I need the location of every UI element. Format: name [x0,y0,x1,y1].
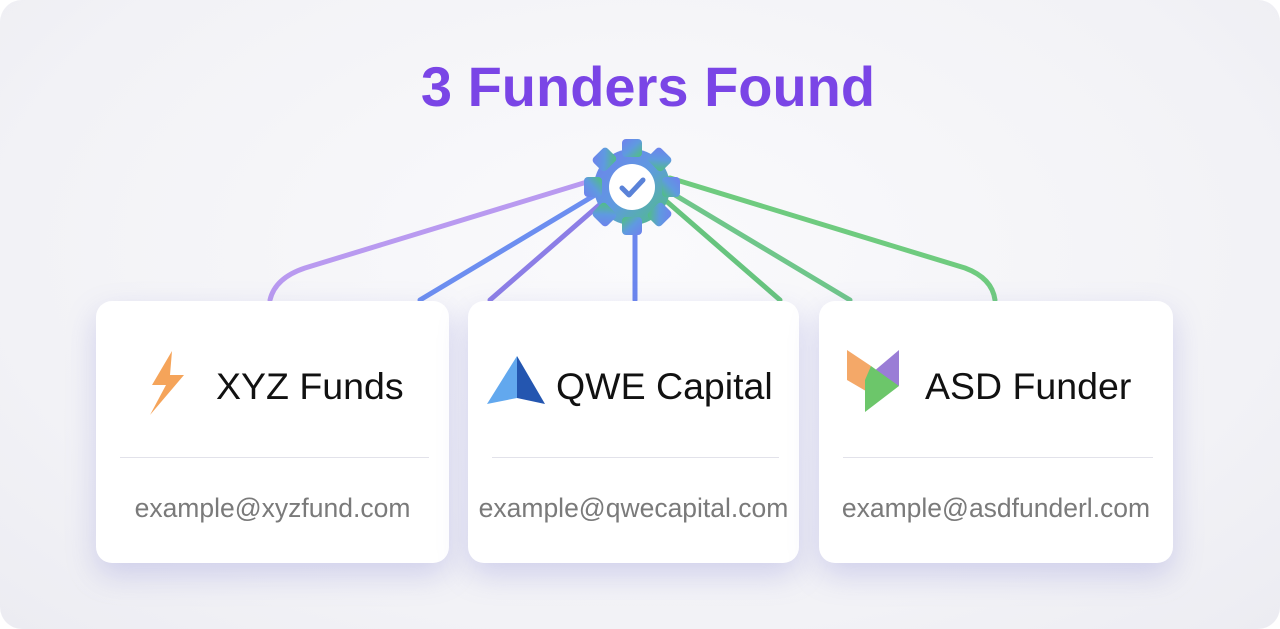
icon: lightning [150,351,184,415]
name: QWE Capital [556,365,773,407]
name: ASD Funder [925,365,1131,407]
email: example@xyzfund.com [135,493,410,523]
icon: gear with check [584,139,680,235]
card: ASD Funder [819,301,1173,563]
email: example@qwecapital.com [479,493,788,523]
card: XYZ Funds [96,301,449,563]
card: QWE Capital [468,301,799,563]
icon: arrow triangle [487,356,545,404]
email: example@asdfunderl.com [842,493,1150,523]
icon: ASD logo [847,350,899,412]
title: 3 Funders Found [421,55,875,118]
name: XYZ Funds [216,365,404,407]
